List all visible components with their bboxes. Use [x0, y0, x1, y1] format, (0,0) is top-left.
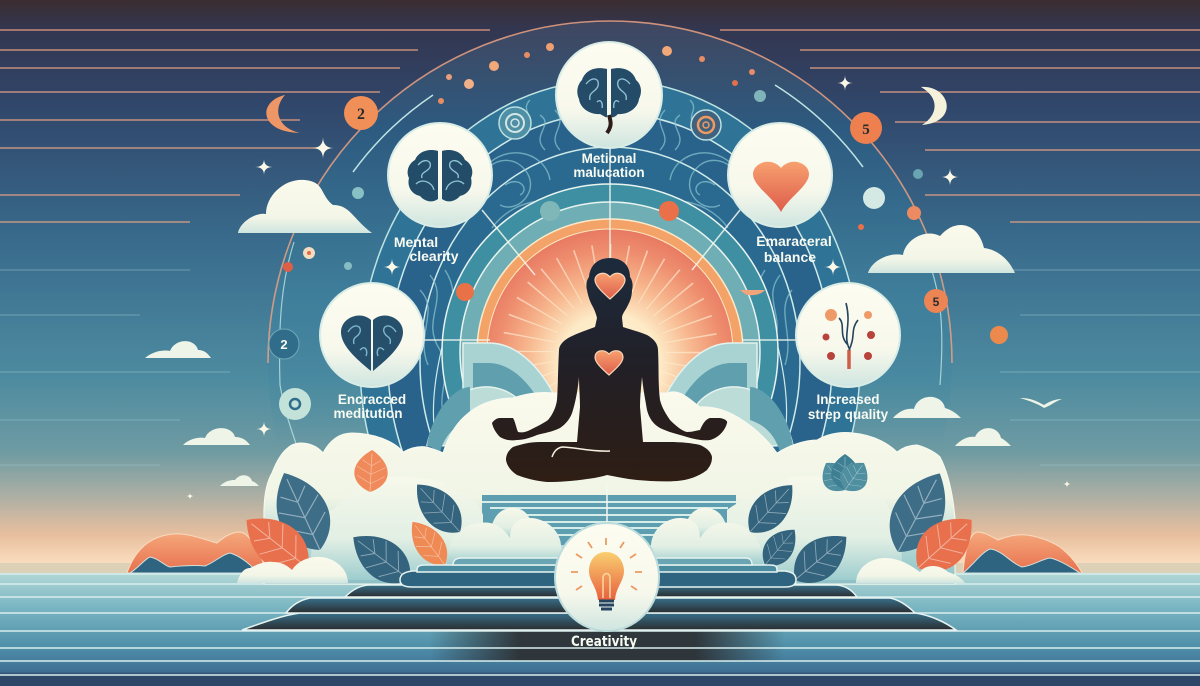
- panel: enhanced meditation: [320, 283, 424, 421]
- label: clearity: [409, 248, 459, 264]
- water swirls: [420, 100, 792, 425]
- vertical connector to bulb: [606, 483, 608, 525]
- water: [0, 573, 1200, 686]
- label: Emaraceral: [756, 233, 832, 249]
- cloud: upper right: [868, 225, 1015, 273]
- badge: orange 2: 2: [357, 106, 365, 123]
- panel: mental clarity: [388, 123, 492, 264]
- icon: brain heart: [341, 316, 403, 371]
- label: Mental: [394, 234, 438, 250]
- badge: small orange 5: 5: [933, 295, 940, 309]
- silhouette: [492, 258, 727, 482]
- icon: right crescent moon: [921, 87, 947, 125]
- badge: small orange 5: [924, 289, 948, 313]
- steps: [242, 558, 956, 630]
- icon: heart: [753, 162, 809, 212]
- low side clouds: [237, 557, 965, 583]
- leaves: [233, 449, 986, 596]
- label: balance: [764, 249, 816, 265]
- small orbit dots: [283, 43, 923, 272]
- panel: emotional balance: [728, 123, 832, 265]
- label: Creativity: [571, 634, 637, 650]
- meditating figure: [492, 258, 727, 482]
- bird: [1020, 398, 1062, 408]
- badge: orange 2: [344, 96, 378, 130]
- badge: orange 5: 5: [862, 122, 870, 138]
- icon: brain: [408, 150, 472, 201]
- label: Metional: [582, 151, 636, 166]
- orange dot: [990, 326, 1008, 344]
- label: Increased: [816, 392, 880, 407]
- concentric rings: [360, 85, 860, 452]
- label: [756, 233, 832, 265]
- heart on chest: [595, 351, 623, 375]
- main cream cloud: [264, 392, 956, 584]
- hills at the horizon: [0, 532, 1200, 573]
- label: [334, 392, 406, 421]
- panel: increased sleep quality: [796, 283, 900, 422]
- badge: orange 5: [850, 112, 882, 144]
- label: Encracced: [338, 392, 406, 407]
- label: [573, 151, 645, 180]
- sun disc with rays: [477, 219, 743, 485]
- icon: brain with stem: [577, 68, 641, 133]
- heart on head: [595, 273, 625, 299]
- icon: incense and dots: [822, 303, 875, 369]
- badge: teal 2: [269, 329, 299, 359]
- label: meditution: [334, 406, 402, 421]
- small clouds: [145, 341, 1011, 486]
- icon: left crescent moon: [266, 95, 300, 133]
- lower cream clouds: [311, 476, 902, 580]
- badge: teal 2: 2: [280, 337, 288, 352]
- teal arches behind the figure: [427, 343, 793, 452]
- label: malucation: [573, 165, 645, 180]
- connector spokes: [424, 148, 796, 340]
- icon: light bulb: [571, 538, 642, 609]
- dome arch: [267, 20, 953, 444]
- cloud: upper left: [238, 180, 372, 233]
- label: [394, 234, 459, 264]
- central stripes: [482, 495, 736, 545]
- panel: top brain: [556, 42, 662, 180]
- label: strep quality: [808, 407, 889, 422]
- leg fold line: [552, 447, 610, 457]
- horizontal sky lines: [0, 30, 1200, 222]
- label: [808, 392, 889, 422]
- sparkle stars: [186, 75, 1071, 500]
- panel: creativity: [555, 523, 659, 650]
- badge: target ring: [279, 388, 311, 420]
- ring ornaments: [456, 107, 765, 301]
